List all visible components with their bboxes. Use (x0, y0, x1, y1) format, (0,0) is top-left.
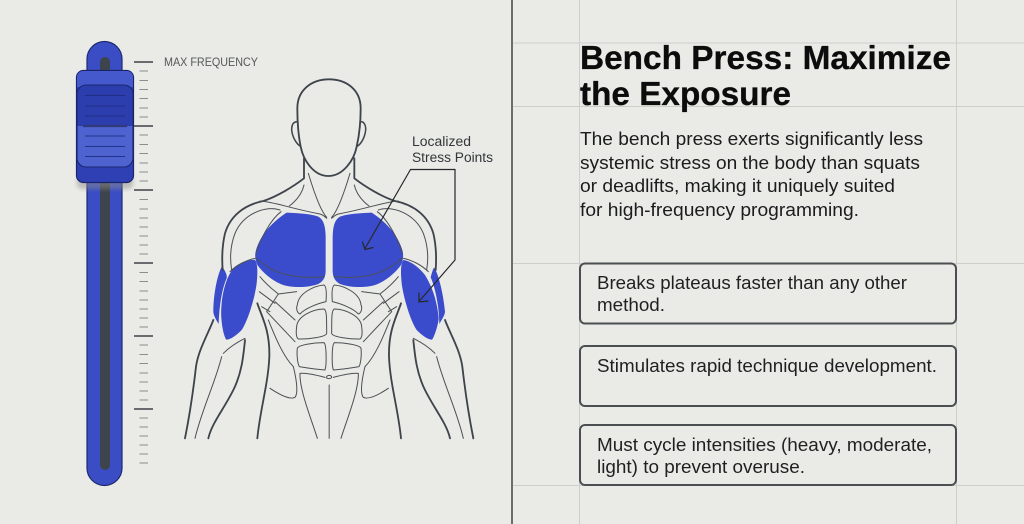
title: the Exposure (580, 75, 791, 112)
intro paragraph: The bench press exerts significantly less (580, 129, 923, 149)
intro paragraph: or deadlifts, making it uniquely suited (580, 176, 895, 196)
slider handle shadow (77, 176, 133, 189)
slider handle (76, 70, 134, 182)
midline and navel (326, 375, 332, 438)
callout box: breaks plateaus: Breaks plateaus faster than any other (597, 273, 907, 293)
body outline and muscle contours, left side (185, 158, 327, 438)
intro paragraph: for high-frequency programming. (580, 200, 859, 220)
callout box: technique development: Stimulates rapid technique development. (597, 356, 937, 376)
body outline and muscle contours, right side (332, 158, 473, 438)
callout label: Localized (412, 134, 471, 149)
callout: localized stress points (362, 134, 493, 302)
anatomy figure: torso line drawing (185, 79, 473, 438)
slider track (87, 42, 122, 486)
title: Bench Press: Maximize (580, 39, 951, 76)
callout box: technique development (580, 346, 956, 406)
intro paragraph: systemic stress on the body than squats (580, 153, 920, 173)
slider: max frequency gauge (76, 42, 258, 486)
muscle highlights: arms (213, 260, 445, 340)
callout label: Stress Points (412, 150, 493, 165)
head (292, 79, 366, 176)
callout box: cycle intensities: Must cycle intensities (heavy, moderate, (597, 435, 932, 455)
callout box: breaks plateaus (580, 264, 956, 324)
callout leader lines with arrows (362, 170, 455, 302)
frequency scale ticks (134, 62, 153, 463)
callout box: cycle intensities (580, 425, 956, 485)
callout box: breaks plateaus: method. (597, 295, 665, 315)
label: max frequency: MAX FREQUENCY (164, 55, 258, 69)
muscle highlights: chest (255, 213, 403, 287)
callout box: cycle intensities: light) to prevent overuse. (597, 457, 805, 477)
slider inner channel (100, 57, 110, 470)
